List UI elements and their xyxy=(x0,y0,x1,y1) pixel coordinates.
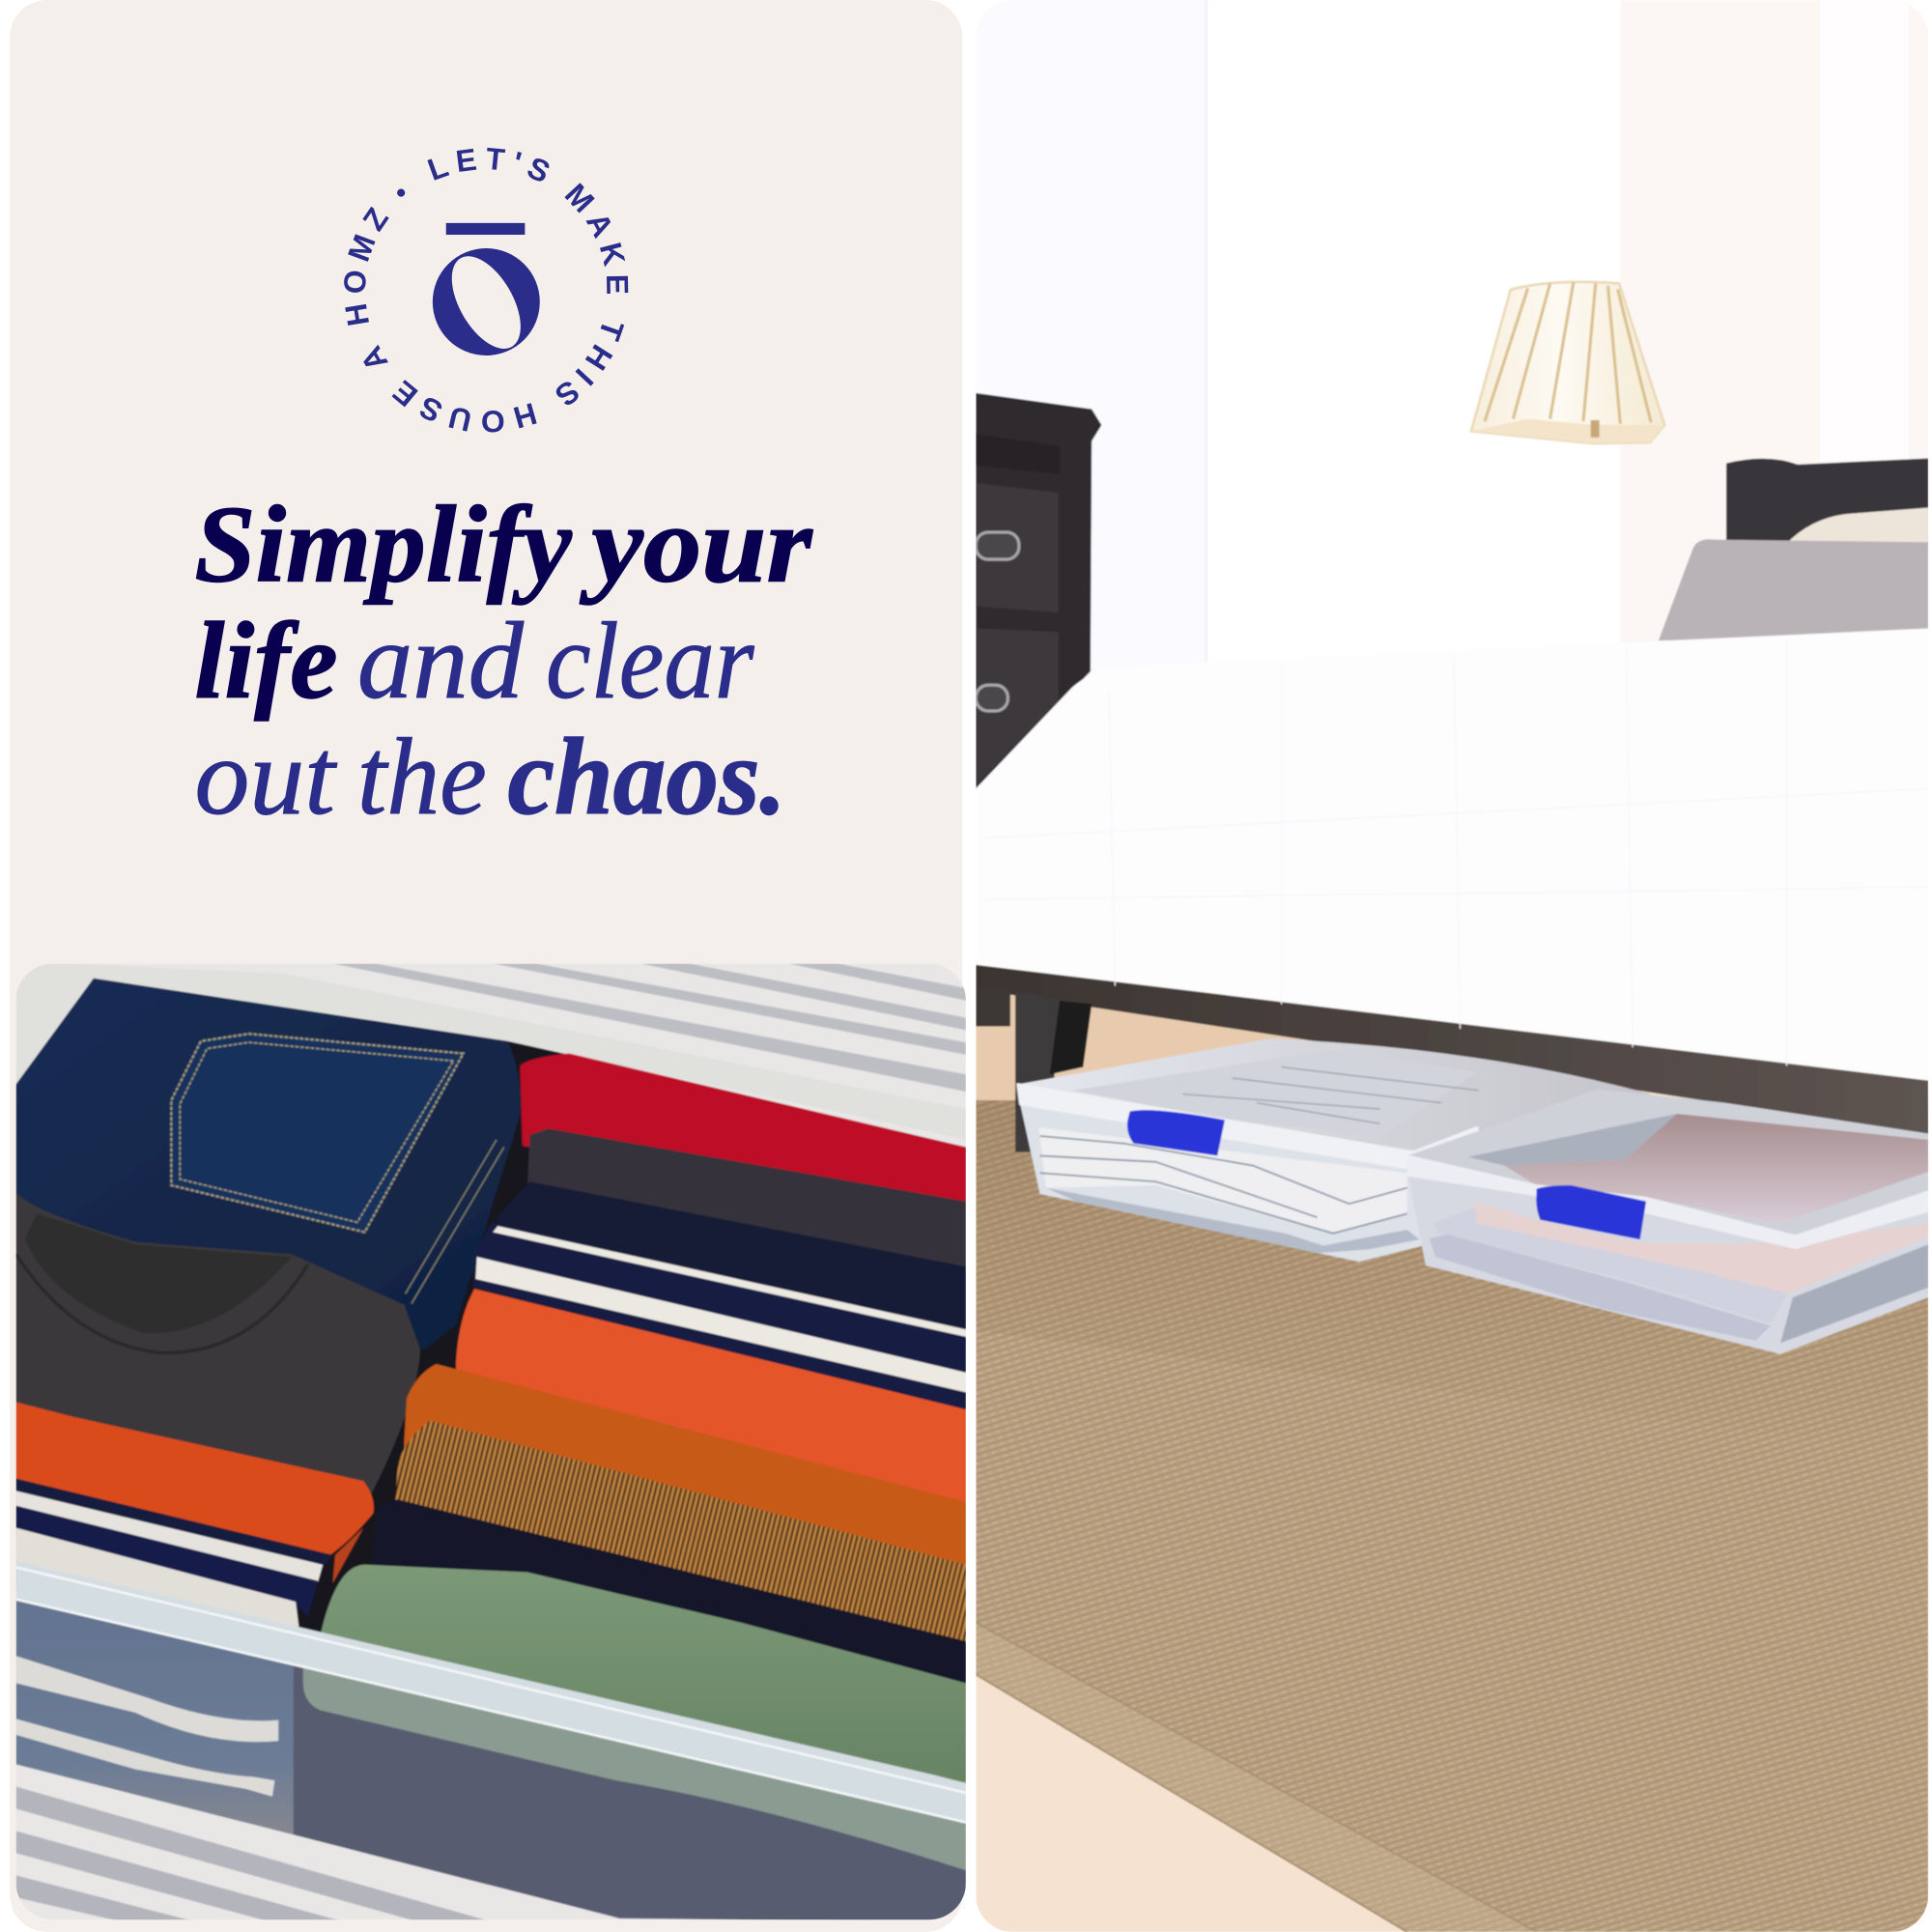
floor xyxy=(976,961,1928,1932)
heading: life xyxy=(195,600,337,722)
heading: chaos. xyxy=(508,716,786,838)
blue clasp, right bin xyxy=(1536,1185,1646,1239)
bright orange top xyxy=(456,1289,966,1516)
navy sweater xyxy=(497,1181,966,1328)
headboard xyxy=(1726,458,1928,549)
heading: clear xyxy=(546,600,754,722)
photo contents, softened xyxy=(976,0,1928,1932)
panel: left brand panel xyxy=(10,0,966,1932)
dark grey sweater xyxy=(527,1128,966,1282)
box front wall, right window xyxy=(294,1663,966,1922)
heading: and xyxy=(357,600,525,722)
grey pillow xyxy=(1659,539,1928,640)
folded linens, right bin xyxy=(1430,1202,1928,1343)
folded jeans xyxy=(16,979,521,1350)
bed frame xyxy=(976,965,1928,1152)
striped navy and white sweater xyxy=(473,1222,966,1410)
cream pillow xyxy=(1785,508,1928,554)
green top xyxy=(321,1565,966,1789)
heading: Simplify xyxy=(195,484,572,606)
icon: o with macron xyxy=(433,223,540,360)
heading: out xyxy=(195,716,337,838)
slogan separator dot xyxy=(397,189,405,197)
bedding stripes, bottom xyxy=(16,1786,493,1922)
box interior shadow xyxy=(15,978,964,1633)
red sweater xyxy=(520,1054,966,1220)
bedding background xyxy=(16,963,966,1919)
heading: your xyxy=(579,484,812,606)
striped sweater, left stack xyxy=(16,1479,332,1632)
folded linens, left bin xyxy=(1038,1127,1419,1253)
orange tee, left stack xyxy=(16,1403,374,1583)
dark navy top xyxy=(372,1499,966,1700)
storage bin, left xyxy=(1018,1038,1651,1262)
white stripes seen through wall xyxy=(16,1656,278,1797)
charcoal t-shirt xyxy=(16,1193,420,1497)
lid, right bin xyxy=(1407,1090,1928,1236)
white duvet xyxy=(976,629,1928,1081)
circular slogan: LET'S MAKE THIS HOUSE A HOMZ xyxy=(344,147,628,433)
floor lamp shade xyxy=(1471,282,1664,443)
panel: bedroom photo xyxy=(976,0,1928,1932)
heading xyxy=(195,484,812,838)
dresser xyxy=(976,393,1101,788)
corduroy stripe top xyxy=(395,1421,966,1658)
logo badge xyxy=(344,147,628,433)
rust top xyxy=(404,1364,966,1577)
rug xyxy=(976,1100,1928,1932)
wall and curtains xyxy=(976,0,1928,1109)
green reflection in wall xyxy=(303,1665,966,1870)
box back rim xyxy=(16,963,966,1140)
heading: the xyxy=(357,716,487,838)
box front rim xyxy=(16,1561,966,1822)
blue clasp, left bin xyxy=(1127,1110,1225,1155)
photo contents, softened xyxy=(16,963,966,1922)
lid, left bin xyxy=(1018,1038,1651,1155)
box front wall, left window xyxy=(16,1600,294,1834)
drawer handles xyxy=(976,532,1019,711)
photo: folded clothes in a storage box xyxy=(16,963,966,1922)
bedding stripes, top xyxy=(332,963,966,1092)
storage bin, right xyxy=(1407,1090,1928,1354)
